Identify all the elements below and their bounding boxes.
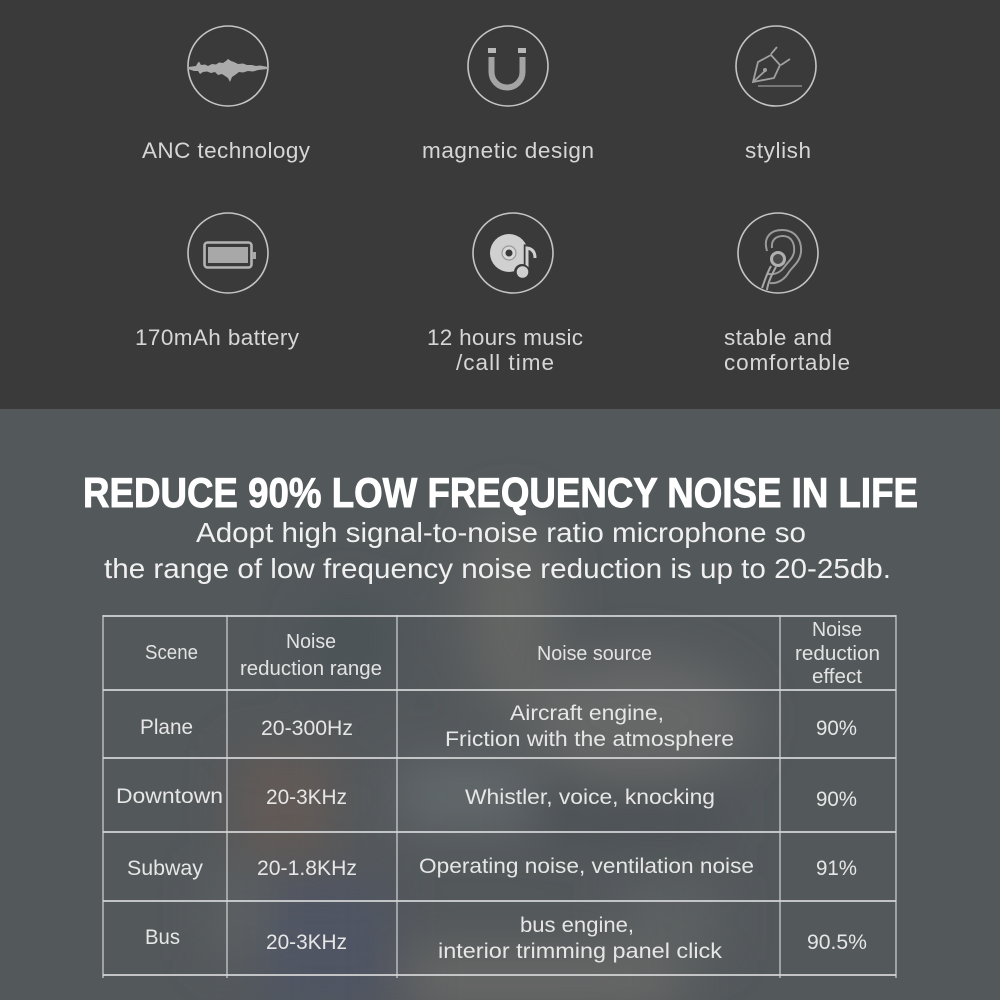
icon: pen nib: [736, 26, 816, 106]
icon: magnet: [468, 26, 548, 106]
table header row: reduction range: [240, 658, 382, 680]
label: stable and comfortable: [724, 325, 850, 375]
label: 12 hours music / call time: [427, 325, 583, 375]
label: ANC technology: ANC technology: [142, 138, 311, 163]
row: Downtown: [116, 785, 857, 811]
row: Bus: interior trimming panel click: [438, 940, 723, 963]
subheading: [104, 517, 891, 584]
row: Bus: bus engine,: [520, 914, 634, 937]
row: Subway: [127, 855, 857, 880]
row: Downtown: 20-3KHz: [266, 786, 347, 809]
row: Downtown: Downtown: [116, 785, 223, 808]
table header row: reduction: [795, 643, 880, 665]
panel: blurred photo background: [0, 409, 1000, 1000]
row: Plane: 90%: [816, 717, 857, 740]
label: stylish: stylish: [745, 138, 811, 163]
row: Plane: 20-300Hz: [261, 717, 353, 740]
table: noise reduction by scene: [103, 615, 896, 978]
row: Bus: 20-3KHz: [266, 931, 347, 954]
label: 12 hours music / call time: 12 hours music: [427, 325, 583, 350]
icon: ANC sound wave: [188, 26, 268, 106]
table header row: effect: [812, 666, 862, 688]
icon: battery: [188, 213, 268, 293]
panel: dark features section: [0, 0, 1000, 409]
table header row: Noise source: [537, 643, 652, 665]
icon: ear with earbud: [738, 213, 818, 293]
table header row: Noise: [286, 631, 336, 653]
row: Bus: 90.5%: [807, 931, 867, 954]
row: Downtown: 90%: [816, 788, 857, 811]
row: Subway: 91%: [816, 857, 857, 880]
table grid: [103, 615, 896, 978]
table header row: Noise: [812, 619, 862, 641]
row: Subway: Operating noise, ventilation noise: [419, 855, 754, 878]
label: 12 hours music / call time: /call time: [456, 350, 554, 375]
row: Plane: Plane: [140, 716, 193, 739]
row: Downtown: Whistler, voice, knocking: [465, 786, 715, 809]
icon: music disc: [473, 213, 553, 293]
row: Subway: Subway: [127, 857, 203, 880]
subheading: Adopt high signal-to-noise ratio microphone so: [196, 517, 806, 548]
row: Bus: Bus: [145, 926, 180, 949]
row: Bus: [145, 914, 867, 963]
table header row: [145, 619, 880, 688]
label: stable and comfortable: stable and: [724, 325, 832, 350]
table header row: Scene: [145, 642, 198, 664]
row: Plane: Friction with the atmosphere: [445, 728, 734, 751]
label: stable and comfortable: comfortable: [724, 350, 850, 375]
label: magnetic design: magnetic design: [422, 138, 594, 163]
row: Subway: 20-1.8KHz: [257, 857, 357, 880]
subheading: the range of low frequency noise reduction is up to 20-25db.: [104, 553, 891, 584]
row: Plane: Aircraft engine,: [510, 702, 664, 725]
label: 170mAh battery: 170mAh battery: [135, 325, 300, 350]
row: Plane: [140, 702, 857, 751]
